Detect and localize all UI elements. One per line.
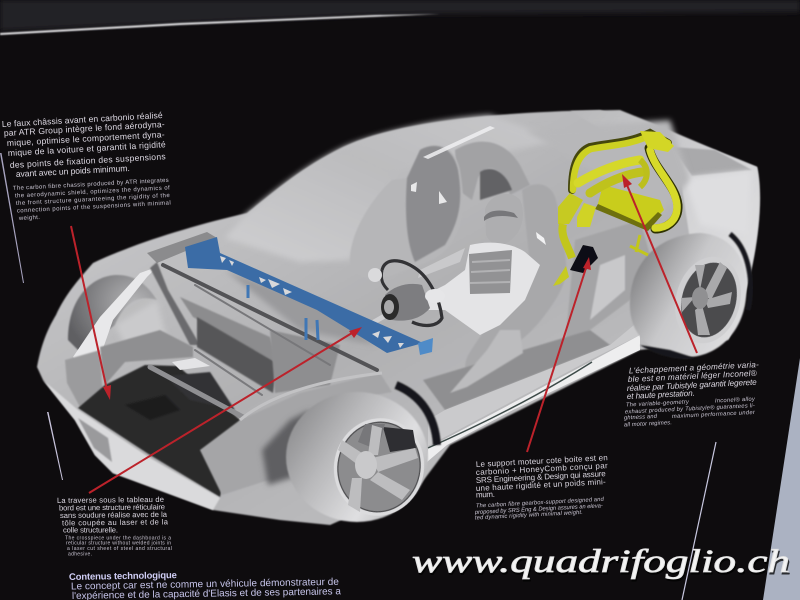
yellow exhaust system <box>553 131 678 286</box>
text block: gearbox support: mum. <box>476 490 495 499</box>
text block: crossbeam: colle structurelle. <box>63 526 118 534</box>
front wheel <box>286 392 433 524</box>
text block: exhaust: ghtness and <box>624 414 658 421</box>
rear cabin and tunnel <box>525 120 690 215</box>
text block: gearbox support: carbonio + HoneyComb conçu par <box>476 461 608 477</box>
arrow: front chassis <box>71 226 111 400</box>
text block: exhaust: ble est en matériel léger Inconel® <box>628 369 758 384</box>
torso <box>415 243 540 335</box>
structural tubes <box>150 265 395 417</box>
rear wheel <box>630 233 751 359</box>
text block: front chassis <box>2 110 171 222</box>
illustration: transparent car cutaway <box>37 110 760 525</box>
text block: front chassis: Le faux châssis avant en carbonio réalisé <box>2 110 163 129</box>
steering wheel <box>368 261 445 325</box>
text block: gearbox support: ted dynamic rigidity with minimal weight. <box>475 510 583 521</box>
text block: crossbeam: bord est une structure réticulaire <box>59 502 165 512</box>
text block: exhaust: all motor regimes. <box>624 420 672 428</box>
car body silhouette <box>37 110 760 525</box>
text block: exhaust: et haute prestation. <box>627 389 695 401</box>
text block: crossbeam: reticular structure without welded joints in <box>66 540 171 546</box>
front bumper <box>43 380 220 510</box>
far fender wheel arch <box>68 275 157 352</box>
text block: gearbox support: proposed by SRS Eng & Design assures an eleva- <box>474 503 603 516</box>
text block: crossbeam: a laser cut sheet of steel and structural <box>67 546 172 552</box>
text block: crossbeam: La traverse sous le tableau de <box>57 495 164 505</box>
watermark: www.quadrifoglio.ch <box>412 544 790 580</box>
rear deck <box>570 110 760 340</box>
text block: crossbeam: sans soudure réalise avec de la <box>60 510 168 520</box>
text block: gearbox support: SRS Engineering & Design qui assure <box>476 469 606 485</box>
text block: front chassis: the aerodynamic shield, optimizes the dynamics of <box>15 185 170 199</box>
text block: front chassis: The carbon fibre chassis produced by ATR integrates <box>13 178 169 192</box>
text block: crossbeam: adhesive. <box>68 552 92 558</box>
text block: front chassis: connection points of the suspensions with minimal <box>17 200 171 214</box>
front wheel arch shadow <box>396 385 437 445</box>
door sill white edge <box>427 335 640 462</box>
text block: front chassis: par ATR Group intègre le fond aérodyna- <box>4 119 165 138</box>
black carbon gearbox support <box>570 245 598 273</box>
driver figure <box>415 194 540 335</box>
radiator support <box>65 350 103 407</box>
text block: exhaust: The variable-geometry <box>626 399 690 408</box>
seat base <box>450 330 523 393</box>
foreground engine bay wall <box>200 373 392 495</box>
windshield and hood <box>225 115 560 262</box>
near seat <box>465 184 566 380</box>
carbon front chassis <box>78 365 240 497</box>
text block: exhaust: maximum performance under <box>672 410 756 420</box>
text block: gearbox support: The carbon fibre gearbox-support designed and <box>476 497 605 509</box>
text block: exhaust: L'échappement a géométrie varia- <box>629 360 759 375</box>
text block: technological content <box>69 570 341 600</box>
exhaust pipes <box>572 133 668 190</box>
radiator and battery box <box>180 297 277 363</box>
highlight on glass <box>423 126 495 159</box>
door sill light band <box>428 320 640 446</box>
text block: front chassis: avant avec un poids minimum. <box>16 163 130 179</box>
watermark <box>412 544 791 582</box>
blue dashboard crossbeam <box>185 237 433 355</box>
text block: exhaust: réalise par Tubistyle garantit legerete <box>627 378 757 393</box>
text block: technological content: Contenus technologique <box>69 570 177 583</box>
text block: gearbox support <box>474 453 608 521</box>
cabin floor <box>423 330 610 410</box>
arrow: crossbeam <box>89 327 362 493</box>
text block: gearbox support: une haute rigidité et un poids mini- <box>476 477 606 493</box>
text block: front chassis: des points de fixation des suspensions <box>10 151 166 170</box>
arrow: exhaust <box>622 174 697 353</box>
roof arch and tunnel <box>455 142 530 200</box>
front structure frame <box>147 232 217 263</box>
text block: front chassis: the front structure guaranteeing the rigidity of the <box>16 193 171 207</box>
text block: front chassis: weight. <box>18 215 40 222</box>
text block: crossbeam: The crosspiece under the dashboard is a <box>65 536 171 542</box>
lower pipes and brackets <box>562 224 572 258</box>
text block: exhaust: Inconel® alloy <box>715 395 756 404</box>
text block: gearbox support: Le support moteur cote boite est en <box>476 453 608 469</box>
muffler <box>597 185 664 228</box>
text block: exhaust: exhaust produced by Tubistyle® guarantees li- <box>625 402 755 415</box>
watermark: www.quadrifoglio.ch <box>413 546 791 582</box>
text block: front chassis: mique de la voiture et garantit la rigidité <box>8 139 166 158</box>
text block: exhaust <box>624 360 759 428</box>
far seat <box>350 145 463 279</box>
text block: crossbeam <box>57 495 172 558</box>
arrow: gearbox support <box>527 257 591 452</box>
transparent fender strip <box>73 267 157 377</box>
text block: front chassis: mique, optimise le comportement dyna- <box>7 129 165 148</box>
text block: technological content: Le concept car est ne comme un véhicule démonstrateur de <box>71 577 339 592</box>
door sill dark line <box>428 362 592 448</box>
text block: crossbeam: tôle coupée au laser et de la <box>62 517 169 527</box>
catalytic converters <box>558 193 583 224</box>
